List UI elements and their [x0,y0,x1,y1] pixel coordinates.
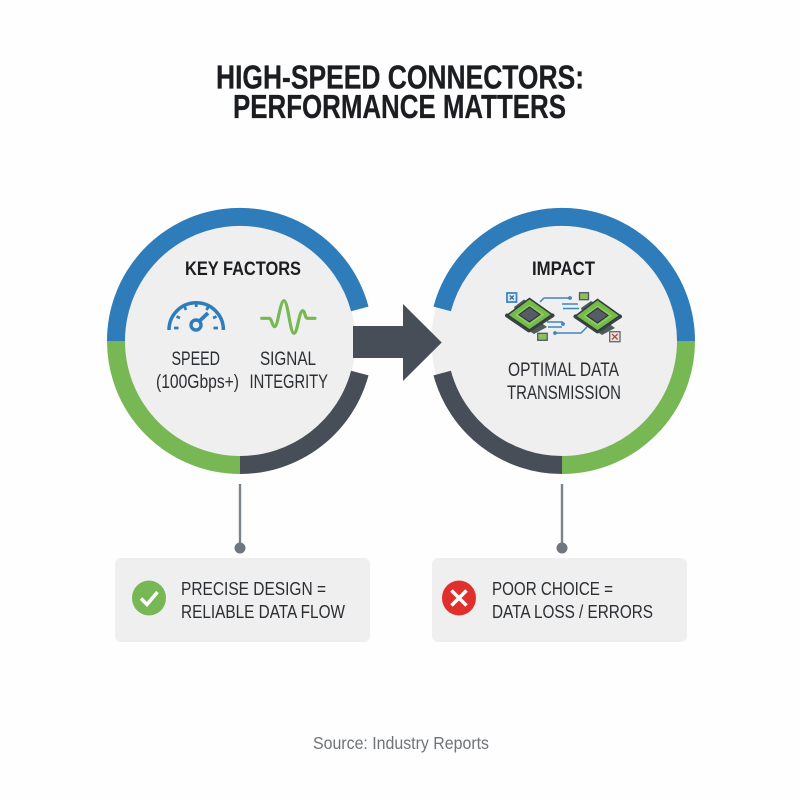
connector: right [556,484,568,554]
label: signal integrity [250,348,328,393]
chip: right [576,300,620,335]
ring segment: dark [442,373,562,465]
icon: cross [442,580,476,616]
small green box top [580,293,588,300]
callout text [492,578,653,622]
title: HIGH-SPEED CONNECTORS: [216,58,584,96]
callout text [181,578,345,622]
label: optimal data transmission: TRANSMISSION [507,382,621,404]
ring segment: blue [442,217,686,341]
ring segment: dark [240,373,360,465]
title: PERFORMANCE MATTERS [233,88,566,125]
ring segment: green [116,341,240,465]
source note: Source: Industry Reports [313,733,489,753]
label: optimal data transmission: OPTIMAL DATA [508,359,619,381]
connection traces [540,298,587,333]
icon: connected chips [507,293,620,342]
callout text: POOR CHOICE = [492,578,613,599]
label: speed [156,348,239,393]
heading: key factors: KEY FACTORS [185,258,301,280]
label: speed: (100Gbps+) [156,371,239,393]
small green box bottom [538,333,547,340]
callout: precise design [115,558,370,642]
label: optimal data transmission [507,359,621,404]
label: signal integrity: SIGNAL [260,348,316,370]
label: speed: SPEED [172,348,220,370]
panel: key factors circle [116,217,360,465]
callout: poor choice [432,558,687,642]
title [216,58,584,125]
ring segment: blue [116,217,360,341]
callout text: RELIABLE DATA FLOW [181,601,345,622]
arrow [353,304,442,381]
small blue x box [507,293,516,302]
icon: speedometer [169,302,223,330]
chip: left [507,298,552,334]
callout text: DATA LOSS / ERRORS [492,601,653,622]
icon: check [132,580,166,616]
icon: signal wave [262,301,315,333]
label: signal integrity: INTEGRITY [250,371,328,393]
panel: impact circle [432,210,692,472]
connector: left [234,484,246,554]
heading: impact: IMPACT [532,258,595,280]
callout text: PRECISE DESIGN = [181,578,326,599]
ring segment: green [562,341,686,465]
small red x box [610,332,620,342]
